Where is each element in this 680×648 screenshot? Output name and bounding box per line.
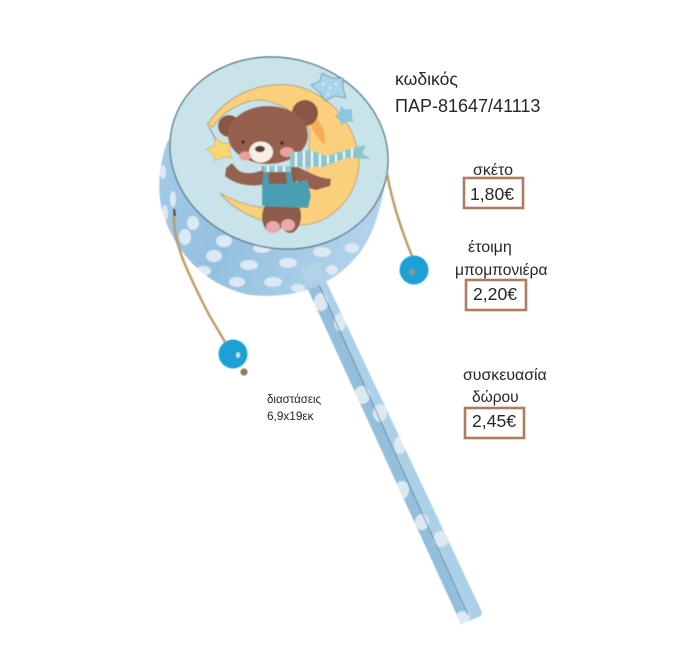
left cheek [239, 152, 251, 160]
bear foot left [266, 221, 280, 233]
collar [263, 166, 291, 172]
price: gift packaging: 2,45€ [472, 411, 516, 431]
right eye [280, 141, 284, 145]
product code: ΠΑΡ-81647/41113 [395, 96, 540, 116]
nose [255, 146, 265, 152]
head [228, 106, 308, 164]
price: plain: σκέτο [473, 162, 513, 179]
left bead [218, 340, 248, 376]
dimensions note: 6,9x19εκ [267, 409, 314, 423]
price: gift packaging: δώρου [472, 389, 519, 406]
dimensions note: διαστάσεις [267, 394, 322, 406]
price: ready keychain: 2,20€ [473, 284, 517, 304]
product: rattle toy [148, 33, 482, 624]
right cheek [280, 147, 294, 157]
right bead [400, 256, 428, 284]
bear [218, 100, 371, 233]
price: ready keychain [455, 239, 548, 310]
dimensions note [267, 394, 322, 423]
right ear [292, 100, 318, 126]
bear legs [262, 201, 284, 233]
overalls [262, 170, 311, 208]
price: gift packaging: συσκευασία [463, 367, 547, 384]
orange moon shade [306, 112, 325, 145]
left eye [241, 140, 245, 144]
product code [395, 69, 540, 116]
scarf [290, 145, 371, 167]
price: ready keychain: μπομπονιέρα [455, 262, 548, 279]
infographic canvas [158, 56, 547, 624]
small blue star [335, 107, 353, 125]
price: ready keychain: έτοιμη [468, 239, 512, 256]
left string [174, 209, 226, 344]
moon [207, 85, 359, 225]
product code: κωδικός [395, 69, 458, 89]
yellow hanging star [206, 127, 232, 161]
bear torso [262, 166, 296, 188]
bear foot right [281, 219, 295, 231]
big blue star [311, 73, 346, 101]
muzzle [249, 142, 273, 162]
left ear [218, 115, 240, 137]
stick [300, 264, 482, 624]
price: gift packaging [463, 367, 547, 438]
drum body with polka dots [159, 140, 385, 296]
price: plain [464, 162, 523, 208]
drum lid [148, 33, 410, 273]
bear arms [225, 163, 331, 190]
right string [387, 174, 412, 256]
price: plain: 1,80€ [470, 184, 514, 204]
